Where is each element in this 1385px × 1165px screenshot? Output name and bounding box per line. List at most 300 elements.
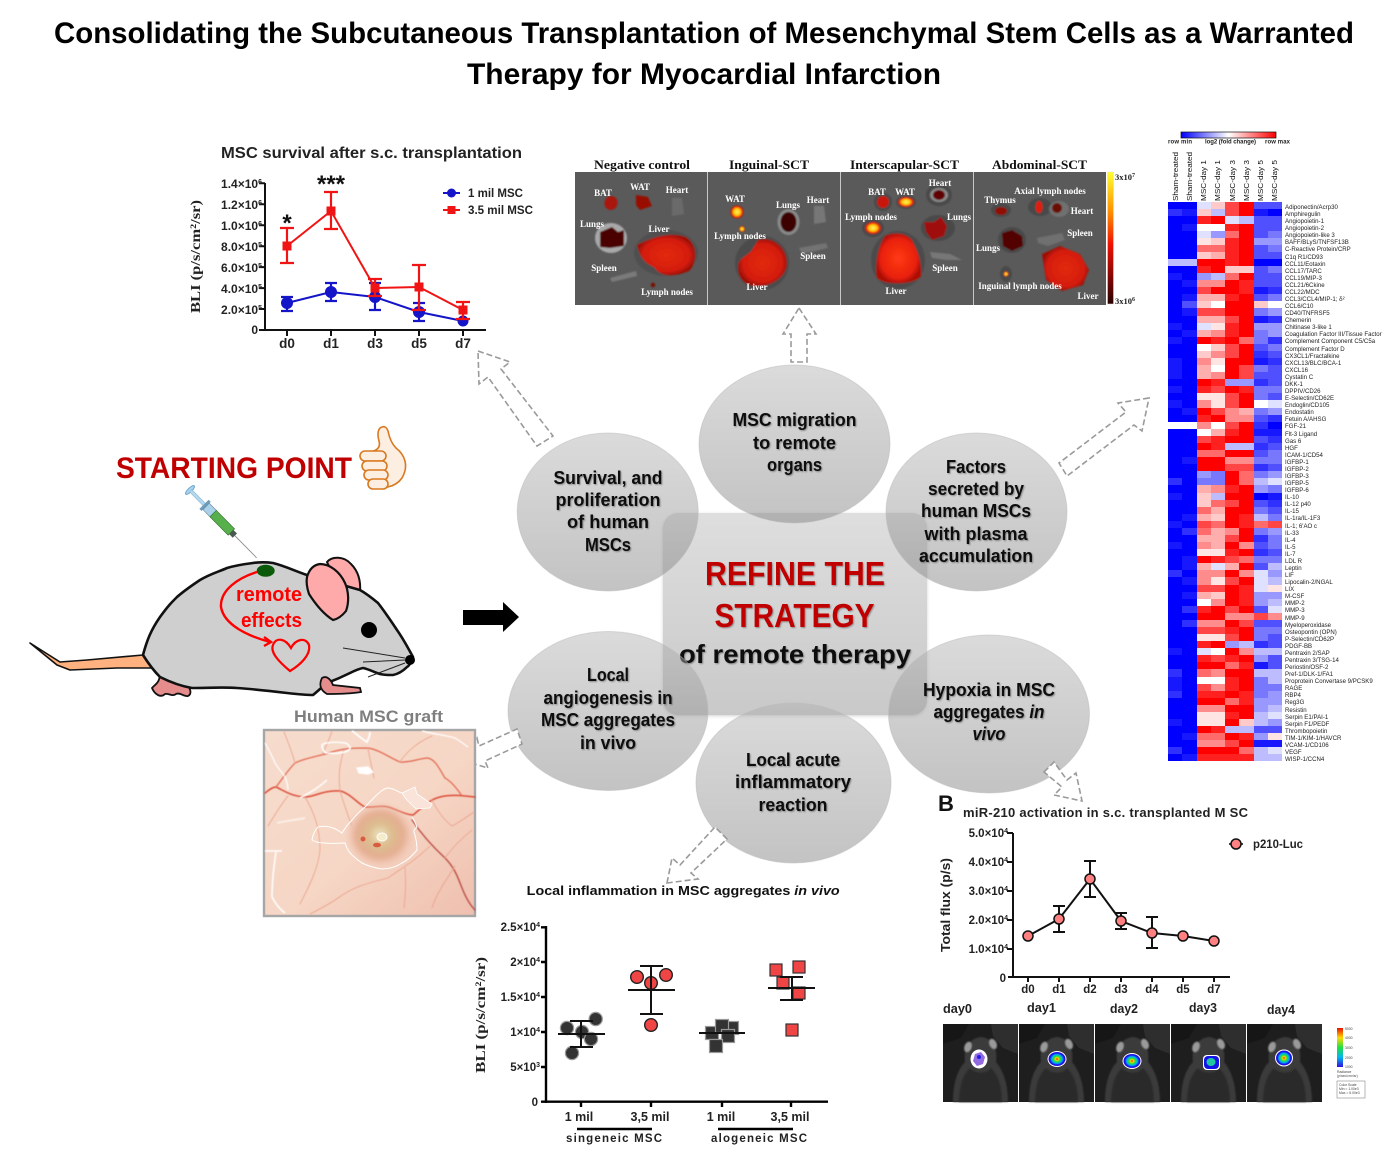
circle: survival and proliferation: of human [567, 512, 649, 532]
heatmap row labels: Lipocalin-2/NGAL [1285, 579, 1333, 586]
y tick labels: 4 [1004, 857, 1008, 864]
x tick labels [279, 336, 471, 351]
group labels: singeneic MSC [566, 1133, 662, 1145]
heatmap row labels: IL-1ra/IL-1F3 [1285, 515, 1320, 522]
panel: organ imaging: Liver [886, 286, 906, 296]
heatmap row labels: IL-10 [1285, 494, 1299, 501]
panel: organ imaging: Heart [1071, 206, 1093, 216]
circle: MSC migration: organs [767, 455, 822, 475]
panel: organ imaging: Abdominal-SCT [992, 157, 1087, 172]
x labels: 1 mil [707, 1110, 735, 1124]
image: day 1 [1019, 1024, 1094, 1102]
colour scale: 6 [1132, 297, 1135, 303]
remote effects label [236, 584, 302, 632]
central heading: REFINE THE [705, 555, 885, 592]
y tick labels [969, 828, 1008, 985]
heatmap row labels: DKK-1 [1285, 381, 1303, 388]
panel: organ imaging: Interscapular-SCT [850, 157, 959, 172]
circle: hypoxia: aggregates in [934, 702, 1045, 722]
remote effects label: effects [241, 610, 302, 632]
panel: organ imaging: Heart [666, 185, 688, 195]
y tick labels: 1.5×10 [501, 992, 536, 1004]
heatmap row labels: Angiopoietin-1 [1285, 218, 1324, 225]
back foot [152, 670, 190, 696]
heatmap row labels: CCL6/C10 [1285, 303, 1313, 310]
x tick labels: d7 [455, 336, 471, 351]
photo highlights [265, 731, 468, 913]
day labels: day0 [943, 1001, 972, 1016]
panel: organ imaging: Spleen [932, 263, 958, 273]
heatmap row labels: WISP-1/CCN4 [1285, 756, 1324, 763]
front ear [307, 564, 348, 620]
heatmap row labels: Endostatin [1285, 409, 1314, 416]
heatmap legend and column labels: MSC-day 3 [1244, 160, 1251, 201]
x tick labels: d1 [323, 336, 339, 351]
chart title: miR-210 activation in s.c. transplanted M SC [963, 805, 1249, 820]
heatmap legend and column labels: Sham-treated [1187, 152, 1194, 201]
heatmap row labels: Chitinase 3-like 1 [1285, 324, 1332, 331]
y axis label: BLI (p/s/cm²/sr) [474, 957, 489, 1073]
circle: survival and proliferation: MSCs [585, 535, 631, 555]
circle: hypoxia [888, 635, 1090, 793]
heatmap row labels: Gas 6 [1285, 438, 1301, 445]
heatmap row labels: Pentraxin 2/SAP [1285, 650, 1330, 657]
front foot [320, 677, 361, 694]
chart: miR-210 activation [938, 791, 1303, 996]
group labels: alogeneic MSC [711, 1133, 807, 1145]
circle: secreted factors: accumulation [919, 546, 1033, 566]
circle: local angiogenesis: Local [587, 665, 629, 685]
image: day 2 [1095, 1024, 1170, 1102]
rear ear [327, 558, 360, 592]
heatmap row labels: P-Selectin/CD62P [1285, 636, 1334, 643]
panel: organ imaging: Liver [1078, 291, 1098, 301]
luminescence colour scale: 4000 [1345, 1036, 1353, 1040]
significance stars: *** [317, 171, 346, 198]
circle: secreted factors: secreted by [928, 479, 1024, 499]
y tick labels: 5 [258, 242, 262, 249]
y tick labels: 4 [1004, 828, 1008, 835]
panel: organ imaging: Liver [648, 224, 670, 234]
panel: organ imaging: Spleen [1067, 228, 1093, 238]
icon: thumbs up [360, 427, 406, 489]
luminescence colour scale: 1000 [1345, 1065, 1353, 1069]
panel: human MSC graft photo [264, 707, 475, 916]
heatmap row labels: CCL19/MIP-3 [1285, 275, 1322, 282]
y tick labels: 6.0×10 [221, 261, 258, 275]
heatmap legend and column labels: MSC-day 5 [1258, 160, 1265, 201]
colour scale: 7 [1132, 173, 1135, 179]
y tick labels: 5×10 [510, 1062, 536, 1074]
luminescence colour scale: Max = 5.00e3 [1339, 1091, 1360, 1095]
points: singeneic 3.5 mil [628, 966, 675, 1031]
circle: local acute inflammatory reaction [696, 703, 891, 863]
y tick labels: 4.0×10 [221, 282, 258, 296]
column headers: Negative control [594, 157, 690, 172]
circle: local acute inflammatory reaction: Local acute [746, 750, 840, 770]
heatmap legend and column labels: row min [1168, 140, 1192, 146]
circle: secreted factors: human MSCs [921, 501, 1031, 521]
x tick labels: d0 [279, 336, 295, 351]
heatmap row labels: Coagulation Factor III/Tissue Factor [1285, 331, 1382, 338]
panel: organ imaging: Inguinal-SCT [729, 157, 809, 172]
heatmap row labels: IGFBP-6 [1285, 487, 1309, 494]
y tick labels: 1.0×10 [221, 219, 258, 233]
y tick labels [501, 922, 540, 1109]
heatmap legend and column labels: Sham-treated [1173, 152, 1180, 201]
luminescence colour scale: 5000 [1345, 1027, 1353, 1031]
x tick labels: d7 [1207, 984, 1221, 996]
y tick labels: 4 [1004, 915, 1008, 922]
graft heading: Human MSC graft [294, 707, 443, 726]
panel: organ imaging: Spleen [800, 251, 826, 261]
legend [1229, 837, 1303, 851]
heatmap row labels: M-CSF [1285, 593, 1304, 600]
panel: organ imaging: Lungs [776, 200, 800, 210]
points: allogeneic 3.5 mil [768, 961, 815, 1036]
y tick labels: 3 [536, 1062, 540, 1069]
heatmap row labels: ICAM-1/CD54 [1285, 452, 1323, 459]
heatmap row labels: Angiopoietin-like 3 [1285, 232, 1335, 239]
series: p210-Luc [1023, 861, 1219, 948]
heatmap row labels: CXCL13/BLC/BCA-1 [1285, 360, 1341, 367]
photo graft [312, 787, 432, 869]
x labels: 3,5 mil [771, 1110, 809, 1124]
heatmap row labels: Endoglin/CD105 [1285, 402, 1329, 409]
heatmap row labels: LDL R [1285, 558, 1302, 565]
series: 1 mil MSC [281, 283, 468, 326]
central heading [679, 555, 912, 669]
heatmap row labels: RAGE [1285, 685, 1302, 692]
image: interscapular SCT [862, 184, 962, 289]
panel: organ imaging: Thymus [984, 195, 1016, 205]
y tick labels: 0 [1000, 973, 1006, 985]
heatmap row labels: CCL17/TARC [1285, 268, 1322, 275]
image: negative control [595, 194, 698, 287]
legend: 3.5 mil MSC [468, 205, 533, 217]
x labels: 3,5 mil [631, 1110, 669, 1124]
photo veins [265, 731, 475, 914]
heatmap row labels: IL-15 [1285, 508, 1299, 515]
central heading: of remote therapy [679, 639, 912, 669]
title: Consolidating the Subcutaneous Transplantation of Mesenchymal Stem Cells as a Warranted [54, 17, 1354, 50]
x tick labels: d1 [1052, 984, 1066, 996]
heatmap row labels: Resistin [1285, 707, 1307, 714]
heatmap row labels: LIX [1285, 586, 1294, 593]
arrow: black arrow to strategy [463, 602, 519, 632]
circle: hypoxia: vivo [972, 724, 1006, 744]
heatmap row labels: Serpin F1/PEDF [1285, 721, 1329, 728]
x labels [565, 1110, 809, 1124]
panel: organ imaging: Heart [929, 178, 951, 188]
heatmap row labels: FGF-21 [1285, 423, 1306, 430]
circle: survival and proliferation: proliferation [556, 490, 660, 510]
points: allogeneic 1 mil [699, 1020, 745, 1052]
arrow: inflammation to scatter plot [667, 827, 727, 883]
panel: organ imaging: WAT [630, 182, 650, 192]
y tick labels: 2×10 [510, 957, 536, 969]
heatmap row labels [1285, 204, 1382, 763]
y axis label: BLI (p/s/cm²/sr) [189, 200, 204, 313]
circle: local angiogenesis: in vivo [580, 733, 636, 753]
y tick labels: 5 [258, 263, 262, 270]
title [54, 17, 1354, 91]
colour scale: 3x10 [1115, 172, 1132, 182]
heatmap row labels: Myeloperoxidase [1285, 622, 1331, 629]
day labels: day4 [1267, 1002, 1296, 1017]
circle: secreted factors: with plasma [924, 524, 1028, 544]
chart title: MSC survival after s.c. transplantation [221, 145, 522, 162]
heatmap row labels: IL-5 [1285, 544, 1296, 551]
heatmap row labels: Osteopontin (OPN) [1285, 629, 1337, 636]
mouse illustration [30, 558, 415, 696]
image: inguinal SCT [730, 206, 828, 290]
arrow: factors to heatmap [1059, 398, 1149, 476]
heatmap row labels: IGFBP-2 [1285, 466, 1309, 473]
eye [361, 622, 377, 638]
heatmap row labels: Angiopoietin-2 [1285, 225, 1324, 232]
y tick labels: 5.0×10 [969, 828, 1004, 840]
heatmap row labels: Thrombopoietin [1285, 728, 1327, 735]
heatmap row labels: Cystatin C [1285, 374, 1313, 381]
y tick labels: 1×10 [510, 1027, 536, 1039]
heatmap row labels: VEGF [1285, 749, 1302, 756]
circle: MSC migration: MSC migration [732, 410, 856, 430]
panel: organ imaging: Lungs [947, 212, 971, 222]
luminescence colour scale: 3000 [1345, 1046, 1353, 1050]
x tick labels: d4 [1145, 984, 1159, 996]
heatmap row labels: C-Reactive Protein/CRP [1285, 246, 1351, 253]
panel: organ imaging: Spleen [591, 263, 617, 273]
heatmap row labels: IL-4 [1285, 537, 1296, 544]
day labels: day3 [1189, 1000, 1217, 1015]
heatmap legend and column labels: row max [1265, 140, 1291, 146]
y tick labels: 0 [251, 323, 258, 337]
points: singeneic 1 mil [558, 1012, 605, 1060]
luminescence colour scale: Radiance [1337, 1070, 1351, 1074]
heatmap row labels: Periostin/OSF-2 [1285, 664, 1328, 671]
circle: local angiogenesis: MSC aggregates [541, 710, 675, 730]
circle: survival and proliferation [517, 433, 698, 591]
circle: local angiogenesis [508, 632, 708, 790]
heatmap row labels: MMP-2 [1285, 600, 1305, 607]
luminescence colour scale: 2000 [1345, 1056, 1353, 1060]
panel: organ imaging [575, 157, 1135, 306]
panel: organ imaging: Axial lymph nodes [1014, 186, 1086, 196]
y tick labels: 6 [258, 221, 262, 228]
remote effects arrow [221, 572, 271, 646]
y tick labels: 4.0×10 [969, 857, 1004, 869]
axes [259, 183, 486, 336]
significance stars [282, 171, 346, 237]
x tick labels: d3 [1114, 984, 1128, 996]
heatmap legend and column labels [1168, 132, 1291, 201]
axes [1007, 833, 1230, 982]
y tick labels: 3.0×10 [969, 886, 1004, 898]
heatmap row labels: HGF [1285, 445, 1298, 452]
circle: local angiogenesis: angiogenesis in [544, 688, 672, 708]
y tick labels: 4 [1004, 944, 1008, 951]
x tick labels: d5 [411, 336, 427, 351]
heatmap row labels: Pref-1/DLK-1/FA1 [1285, 671, 1333, 678]
heatmap row labels: C1q R1/CD93 [1285, 254, 1323, 261]
chart: local inflammation [474, 883, 840, 1145]
image background [575, 172, 1106, 305]
axes [541, 926, 828, 1107]
title: Therapy for Myocardial Infarction [467, 58, 941, 91]
heatmap grid [1168, 202, 1282, 761]
day labels: day2 [1110, 1001, 1138, 1016]
luminescence colour scale: (p/sec/cm²/sr) [1337, 1074, 1358, 1078]
remote effects label: remote [236, 584, 302, 606]
legend: 1 mil MSC [468, 188, 523, 200]
image: day 0 [943, 1024, 1018, 1102]
heatmap row labels: CX3CL1/Fractalkine [1285, 353, 1340, 360]
icon: syringe [184, 484, 261, 562]
image: day 4 [1247, 1024, 1322, 1102]
heatmap row labels: CCL3/CCL4/MIP-1; δ² [1285, 296, 1345, 303]
circle: local acute inflammatory reaction: reaction [758, 795, 828, 815]
panel: organ imaging: Inguinal lymph nodes [978, 281, 1062, 291]
heatmap row labels: IGFBP-5 [1285, 480, 1309, 487]
panel: organ imaging: Lymph nodes [845, 212, 897, 222]
y tick labels: 1.0×10 [969, 944, 1004, 956]
circle: survival and proliferation: Survival, and [554, 468, 662, 488]
y tick labels: 1.4×10 [221, 177, 258, 191]
heatmap row labels: Pentraxin 3/TSG-14 [1285, 657, 1339, 664]
panel: organ imaging: Heart [807, 195, 829, 205]
heatmap row labels: CCL21/6Ckine [1285, 282, 1325, 289]
heatmap row labels: Flt-3 Ligand [1285, 430, 1317, 438]
heatmap row labels: PDGF-BB [1285, 643, 1312, 650]
heatmap row labels: Chemerin [1285, 317, 1311, 324]
heatmap legend and column labels: MSC-day 3 [1230, 160, 1237, 201]
heatmap legend and column labels: MSC-day 1 [1201, 160, 1208, 201]
panel letter B: B [938, 791, 954, 816]
luminescence colour scale: Color Scale [1339, 1083, 1357, 1087]
luminescence colour scale: Min = 1.00e3 [1339, 1087, 1359, 1091]
circle: secreted factors: Factors [946, 457, 1006, 477]
y tick labels: 4 [536, 1027, 540, 1034]
image: abdominal SCT [991, 198, 1089, 291]
x tick labels: d5 [1176, 984, 1190, 996]
y tick labels: 5 [258, 284, 262, 291]
y tick labels: 2.5×10 [501, 922, 536, 934]
panel: organ imaging: Liver [746, 282, 768, 292]
central heading: STRATEGY [714, 597, 874, 634]
x tick labels: d2 [1083, 984, 1097, 996]
heatmap row labels: BAFF/BLyS/TNFSF13B [1285, 239, 1349, 246]
x tick labels [1021, 984, 1221, 996]
y tick labels: 1.2×10 [221, 198, 258, 212]
x tick labels: d3 [367, 336, 383, 351]
panel: organ imaging: Lymph nodes [714, 231, 766, 241]
y tick labels: 6 [258, 200, 262, 207]
heatmap row labels: IL-1; 6'AO c [1285, 523, 1317, 530]
y tick labels [221, 177, 262, 337]
heatmap row labels: DPPIV/CD26 [1285, 388, 1321, 395]
heatmap row labels: VCAM-1/CD106 [1285, 742, 1329, 749]
y tick labels: 0 [532, 1097, 538, 1109]
y tick labels: 5 [258, 305, 262, 312]
heatmap row labels: MMP-9 [1285, 615, 1305, 622]
heatmap row labels: Complement Factor D [1285, 346, 1345, 353]
heatmap row labels: Fetuin A/AHSG [1285, 416, 1326, 423]
heatmap row labels: CXCL16 [1285, 367, 1308, 374]
y tick labels: 4 [536, 922, 540, 929]
heatmap row labels: IGFBP-3 [1285, 473, 1309, 480]
nose and whiskers [343, 648, 415, 677]
panel: organ imaging: BAT [868, 187, 886, 197]
legend [443, 188, 533, 217]
x tick labels: d0 [1021, 984, 1035, 996]
y tick labels: 4 [536, 957, 540, 964]
y tick labels: 8.0×10 [221, 240, 258, 254]
x labels: 1 mil [565, 1110, 593, 1124]
heatmap legend and column labels: MSC-day 5 [1272, 160, 1279, 201]
heatmap row labels: E-Selectin/CD62E [1285, 395, 1334, 402]
icon: heart [272, 640, 309, 671]
circle: hypoxia: Hypoxia in MSC [923, 680, 1055, 700]
circle: secreted factors [886, 433, 1067, 591]
significance stars: * [282, 210, 292, 237]
day labels [943, 1000, 1296, 1017]
heatmap row labels: IL-33 [1285, 530, 1299, 537]
chart title: Local inflammation in MSC aggregates in vivo [527, 883, 840, 898]
y tick labels: 2.0×10 [221, 303, 258, 317]
colour scale [1108, 172, 1135, 306]
panel: organ imaging: Lungs [580, 219, 604, 229]
arrow: migration to organs [783, 308, 816, 362]
y tick labels: 4 [1004, 886, 1008, 893]
day labels: day1 [1027, 1000, 1056, 1015]
heatmap row labels: CD40/TNFRSF5 [1285, 310, 1330, 317]
panel: organ imaging: BAT [594, 188, 612, 198]
circle: local acute inflammatory reaction: inflammatory [735, 772, 851, 792]
luminescence colour scale [1337, 1027, 1365, 1098]
arrow: angiogenesis to graft [461, 729, 522, 768]
panel: organ imaging: WAT [725, 194, 745, 204]
arrow: hypoxia to miR-210 chart [1044, 762, 1082, 801]
heatmap row labels: CCL11/Eotaxin [1285, 261, 1326, 268]
heatmap row labels: Amphiregulin [1285, 211, 1321, 218]
injected cells [257, 565, 275, 577]
heatmap row labels: Reg3G [1285, 699, 1304, 706]
heatmap row labels: Serpin E1/PAI-1 [1285, 714, 1328, 721]
heatmap row labels: Proprotein Convertase 9/PCSK9 [1285, 678, 1373, 685]
body [143, 562, 413, 695]
y tick labels: 4 [536, 992, 540, 999]
heatmap row labels: Complement Component C5/C5a [1285, 338, 1375, 345]
heatmap row labels: Leptin [1285, 565, 1302, 572]
heatmap legend and column labels: MSC-day 1 [1215, 160, 1222, 201]
y tick labels: 6 [258, 179, 262, 186]
heatmap row labels: IGFBP-1 [1285, 459, 1309, 466]
tail [30, 643, 152, 670]
heatmap row labels: MMP-3 [1285, 607, 1305, 614]
heatmap row labels: TIM-1/KIM-1/HAVCR [1285, 735, 1341, 742]
y tick labels: 2.0×10 [969, 915, 1004, 927]
heatmap row labels: CCL22/MDC [1285, 289, 1320, 296]
circle: MSC migration [699, 365, 890, 523]
heatmap row labels: Adiponectin/Acrp30 [1285, 204, 1338, 211]
circle: MSC migration: to remote [753, 433, 836, 453]
heatmap legend and column labels: log2 (fold change) [1205, 140, 1256, 146]
panel: central strategy box [663, 513, 927, 715]
heading: starting point: STARTING POINT [116, 452, 352, 485]
group labels [566, 1129, 807, 1145]
series: 3.5 mil MSC [280, 192, 470, 319]
